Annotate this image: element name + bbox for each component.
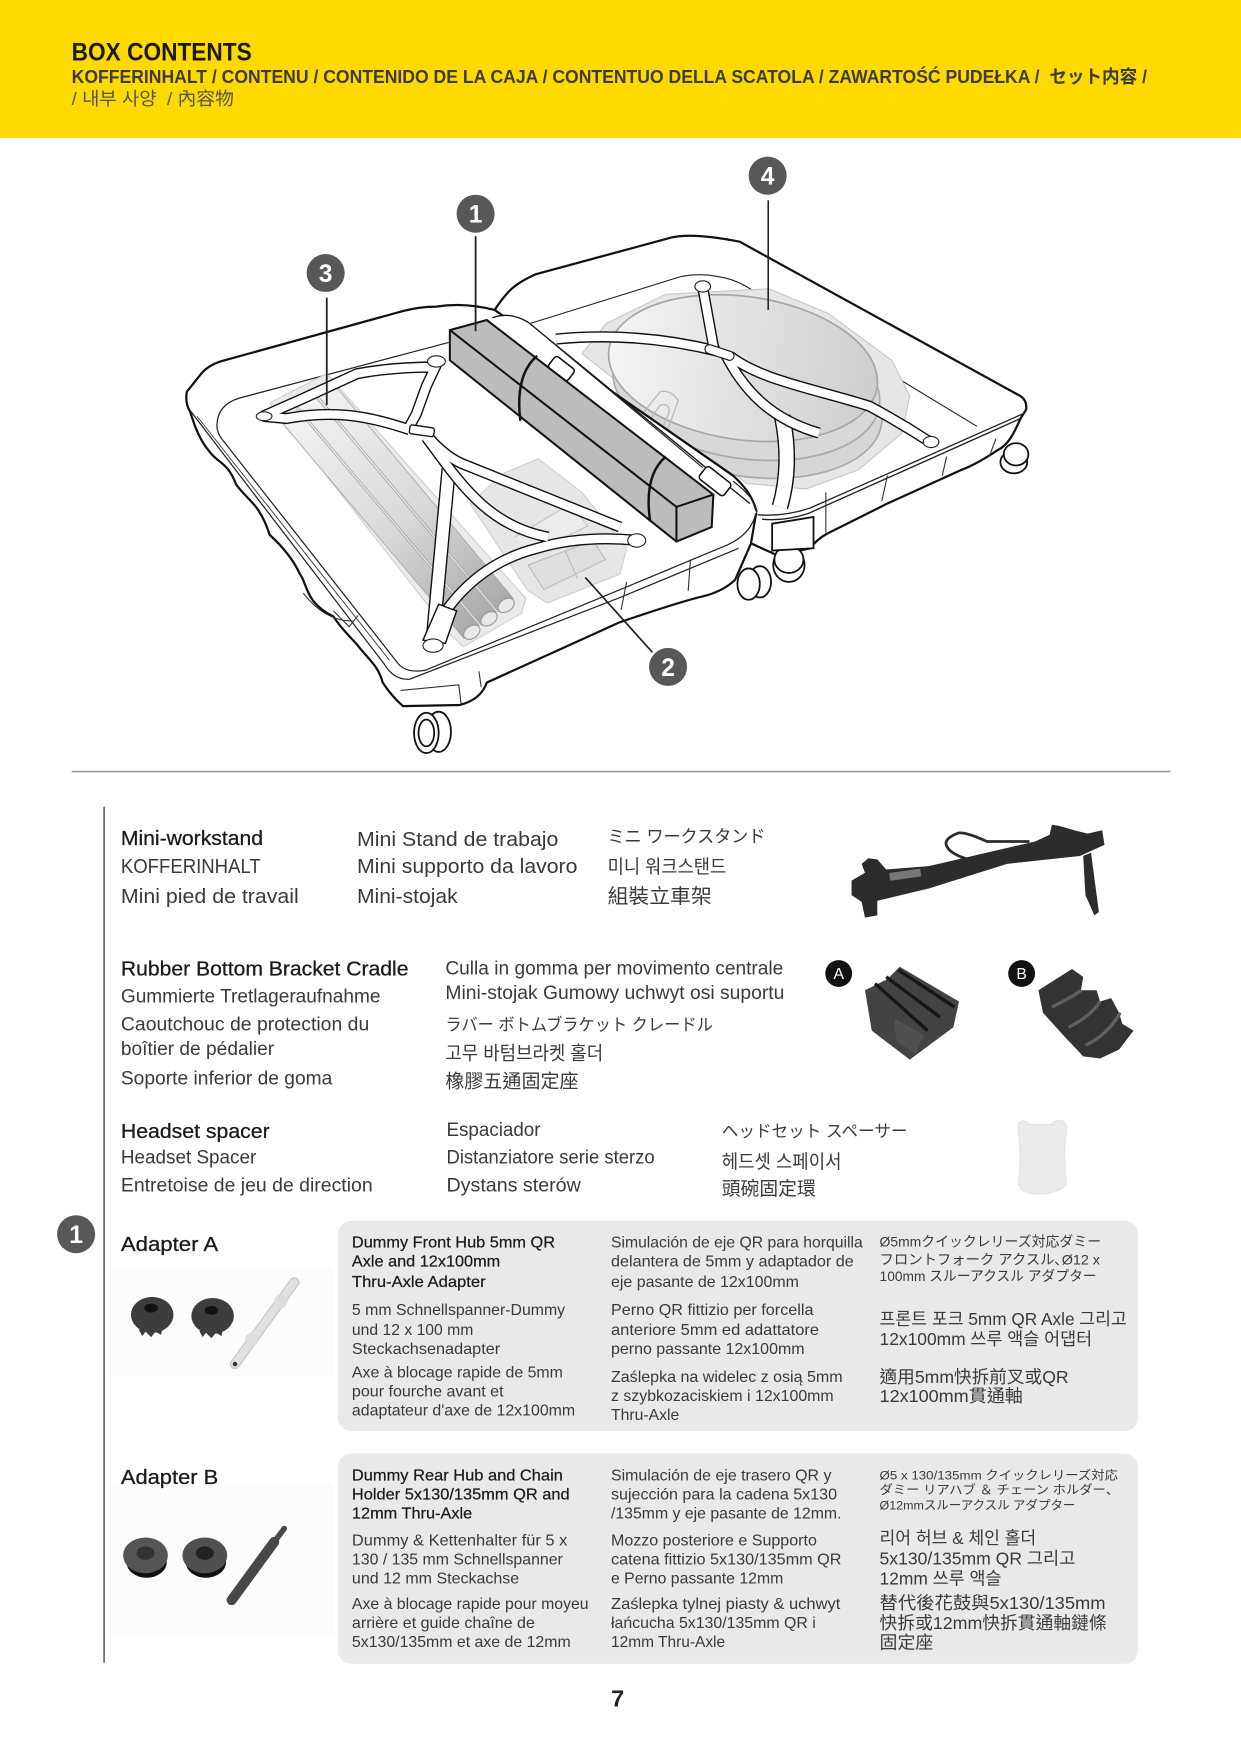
photo: headset spacer xyxy=(1018,1121,1067,1194)
mini-workstand text: Mini-workstand xyxy=(121,828,263,850)
rubber bottom bracket cradle text xyxy=(121,959,784,1093)
badge B: B xyxy=(1016,966,1027,983)
adapter B description panel: 快拆或12mm快拆貫通軸鏈條 xyxy=(880,1613,1107,1633)
photo: cradle B xyxy=(1038,969,1134,1059)
item 2 pad xyxy=(470,459,627,603)
callout 2 xyxy=(585,577,687,686)
adapter B description panel: 130 / 135 mm Schnellspanner xyxy=(352,1551,563,1568)
photo: adapter B xyxy=(110,1483,333,1636)
adapter A description panel: anteriore 5mm ed adattatore xyxy=(611,1322,819,1339)
headset spacer text: Headset spacer xyxy=(121,1121,270,1143)
headset spacer text: Espaciador xyxy=(446,1120,541,1141)
right straps xyxy=(556,281,939,507)
rubber bottom bracket cradle text: Caoutchouc de protection du xyxy=(121,1015,369,1036)
adapter A description panel: und 12 x 100 mm xyxy=(352,1322,473,1339)
adapter B description panel: Simulación de eje trasero QR y xyxy=(611,1467,832,1484)
mini-workstand text: Mini supporto da lavoro xyxy=(357,856,577,878)
adapter B description panel: Ø5 x 130/135mm クイックレリーズ対応 xyxy=(880,1467,1118,1482)
headset spacer text: Dystans sterów xyxy=(446,1176,581,1197)
suitcase illustration xyxy=(186,236,1028,753)
mini-workstand text: Mini-stojak xyxy=(357,886,459,908)
adapter A description panel: Thru-Axle Adapter xyxy=(352,1274,486,1291)
adapter A description panel: 5 mm Schnellspanner-Dummy xyxy=(352,1302,565,1319)
adapter B description panel: Dummy Rear Hub and Chain xyxy=(352,1467,563,1484)
mini-workstand text: KOFFERINHALT xyxy=(121,856,261,878)
headset spacer text: Distanziatore serie sterzo xyxy=(446,1148,655,1169)
photo: cradle A xyxy=(865,967,959,1060)
adapter A description panel: pour fourche avant et xyxy=(352,1383,504,1400)
adapter B description panel: 리어 허브 & 체인 홀더 xyxy=(880,1528,1036,1548)
callout 3: 3 xyxy=(319,261,332,288)
adapter B description panel: 5x130/135mm QR 그리고 xyxy=(880,1548,1075,1568)
adapter A description panel: eje pasante de 12x100mm xyxy=(611,1274,799,1291)
adapter A description panel: 12x100mm貫通軸 xyxy=(880,1386,1023,1406)
header banner xyxy=(0,0,1241,138)
rubber bottom bracket cradle text: Gummierte Tretlageraufnahme xyxy=(121,987,380,1008)
adapter B description panel: catena fittizio 5x130/135mm QR xyxy=(611,1551,841,1568)
adapter B description panel: Dummy & Kettenhalter für 5 x xyxy=(352,1532,568,1549)
photo: mini-workstand xyxy=(852,825,1104,918)
headset spacer text: Headset Spacer xyxy=(121,1148,257,1169)
adapter A description panel: Zaślepka na widelec z osią 5mm xyxy=(611,1369,843,1386)
left straps xyxy=(256,356,646,652)
adapter B description panel: łańcucha 5x130/135mm QR i xyxy=(611,1615,816,1632)
multilingual subtitle line 1: KOFFERINHALT / CONTENU / CONTENIDO DE LA CAJA / CONTENTUO DELLA SCATOLA / ZAWARTOŚĆ PUDEŁKA / セット内容 / xyxy=(72,66,1147,87)
multilingual subtitle line 2: / 내부 사양 / 內容物 xyxy=(72,89,234,109)
mini-workstand text: ミニ ワークスタンド xyxy=(608,827,765,847)
headset spacer text: ヘッドセット スペーサー xyxy=(722,1122,908,1141)
rubber bottom bracket cradle text: ラバー ボトムブラケット クレードル xyxy=(445,1015,713,1035)
adapter A description panel: Perno QR fittizio per forcella xyxy=(611,1302,814,1319)
adapter A description panel: Thru-Axle xyxy=(611,1407,680,1424)
adapter A description panel: 12x100mm 쓰루 액슬 어댑터 xyxy=(880,1329,1092,1349)
callout 3 xyxy=(307,254,345,405)
mini-workstand text: 組裝立車架 xyxy=(608,885,712,908)
adapter B description panel: 12mm Thru-Axle xyxy=(352,1505,473,1522)
callout 4 xyxy=(749,157,787,310)
headset spacer text: 헤드셋 스페이서 xyxy=(722,1151,841,1173)
adapter B description panel: 固定座 xyxy=(880,1632,933,1652)
adapter B description panel: e Perno passante 12mm xyxy=(611,1570,783,1587)
adapter A description panel: delantera de 5mm y adaptador de xyxy=(611,1254,854,1271)
adapter B heading: Adapter B xyxy=(121,1467,218,1489)
adapter A description panel: 프론트 포크 5mm QR Axle 그리고 xyxy=(880,1309,1127,1329)
adapter B description panel: Mozzo posteriore e Supporto xyxy=(611,1532,817,1549)
adapter A description panel: フロントフォーク アクスル､Ø12 x xyxy=(880,1251,1100,1267)
adapter B description panel: Zaślepka tylnej piasty & uchwyt xyxy=(611,1596,841,1613)
adapter A description panel: Steckachsenadapter xyxy=(352,1341,500,1358)
adapter A description panel: 100mm スルーアクスル アダプター xyxy=(880,1268,1097,1284)
callout 4: 4 xyxy=(761,164,775,191)
rubber bottom bracket cradle text: Mini-stojak Gumowy uchwyt osi suportu xyxy=(445,983,784,1004)
mini-workstand text: Mini pied de travail xyxy=(121,886,299,908)
badge A: A xyxy=(833,966,844,983)
adapter A description panel: adaptateur d'axe de 12x100mm xyxy=(352,1403,575,1420)
adapter B description panel: /135mm y eje pasante de 12mm. xyxy=(611,1505,841,1522)
title: BOX CONTENTS xyxy=(72,39,252,66)
callout 1: 1 xyxy=(469,202,482,229)
adapter B description panel: und 12 mm Steckachse xyxy=(352,1570,520,1587)
adapter B description panel: ダミー リアハブ ＆ チェーン ホルダー、 xyxy=(880,1482,1119,1497)
wheels xyxy=(414,443,1028,753)
headset spacer text: 頭碗固定環 xyxy=(722,1178,816,1200)
item 4 disc pad xyxy=(582,278,910,495)
headset spacer text xyxy=(121,1120,908,1200)
rubber bottom bracket cradle text: 고무 바텀브라켓 홀더 xyxy=(445,1043,603,1065)
callout 1 xyxy=(457,195,495,331)
adapter B description panel: Ø12mmスルーアクスル アダプター xyxy=(880,1498,1075,1513)
rubber bottom bracket cradle text: Culla in gomma per movimento centrale xyxy=(445,959,783,980)
headset spacer text: Entretoise de jeu de direction xyxy=(121,1176,373,1197)
adapter B description panel: 5x130/135mm et axe de 12mm xyxy=(352,1634,571,1651)
rubber bottom bracket cradle text: 橡膠五通固定座 xyxy=(445,1071,579,1093)
adapter A description panel: Axe à blocage rapide de 5mm xyxy=(352,1364,563,1381)
adapter B description panel: sujección para la cadena 5x130 xyxy=(611,1486,837,1503)
section number badge xyxy=(57,1215,95,1253)
rubber bottom bracket cradle text: boîtier de pédalier xyxy=(121,1039,275,1060)
adapter A description panel: Dummy Front Hub 5mm QR xyxy=(352,1235,555,1252)
mini-workstand text: Mini Stand de trabajo xyxy=(357,829,558,851)
adapter B description panel: 12mm Thru-Axle xyxy=(611,1634,725,1651)
item 3 tubes xyxy=(270,374,526,647)
hinge xyxy=(481,316,756,526)
adapter A description panel: perno passante 12x100mm xyxy=(611,1341,805,1358)
adapter A description panel: Axle and 12x100mm xyxy=(352,1254,500,1271)
section number badge: 1 xyxy=(69,1222,83,1249)
callout 2: 2 xyxy=(661,655,675,682)
adapter A description panel xyxy=(338,1221,1138,1431)
mini-workstand text: 미니 워크스탠드 xyxy=(608,856,726,878)
adapter A heading: Adapter A xyxy=(121,1234,219,1256)
adapter A description panel: 適用5mm快拆前叉或QR xyxy=(880,1367,1069,1387)
adapter A description panel: z szybkozaciskiem i 12x100mm xyxy=(611,1388,834,1405)
adapter B description panel: 12mm 쓰루 액슬 xyxy=(880,1568,1002,1588)
adapter B description panel: 替代後花鼓與5x130/135mm xyxy=(880,1593,1106,1613)
adapter A description panel: Ø5mmクイックレリーズ対応ダミー xyxy=(880,1234,1101,1250)
rubber bottom bracket cradle text: Soporte inferior de goma xyxy=(121,1068,333,1089)
right shell xyxy=(495,236,1026,555)
item 1 box xyxy=(450,320,713,542)
left shell xyxy=(186,305,756,706)
badge A xyxy=(825,960,852,987)
page number: 7 xyxy=(611,1685,624,1711)
photo: adapter A xyxy=(110,1267,333,1376)
badge B xyxy=(1008,960,1035,987)
adapter B description panel xyxy=(338,1454,1138,1664)
rubber bottom bracket cradle text: Rubber Bottom Bracket Cradle xyxy=(121,959,408,981)
adapter A description panel: Simulación de eje QR para horquilla xyxy=(611,1235,863,1252)
adapter B description panel: Axe à blocage rapide pour moyeu xyxy=(352,1596,589,1613)
adapter B description panel: arrière et guide chaîne de xyxy=(352,1615,535,1632)
adapter B description panel: Holder 5x130/135mm QR and xyxy=(352,1486,570,1503)
mini-workstand text xyxy=(121,827,765,908)
